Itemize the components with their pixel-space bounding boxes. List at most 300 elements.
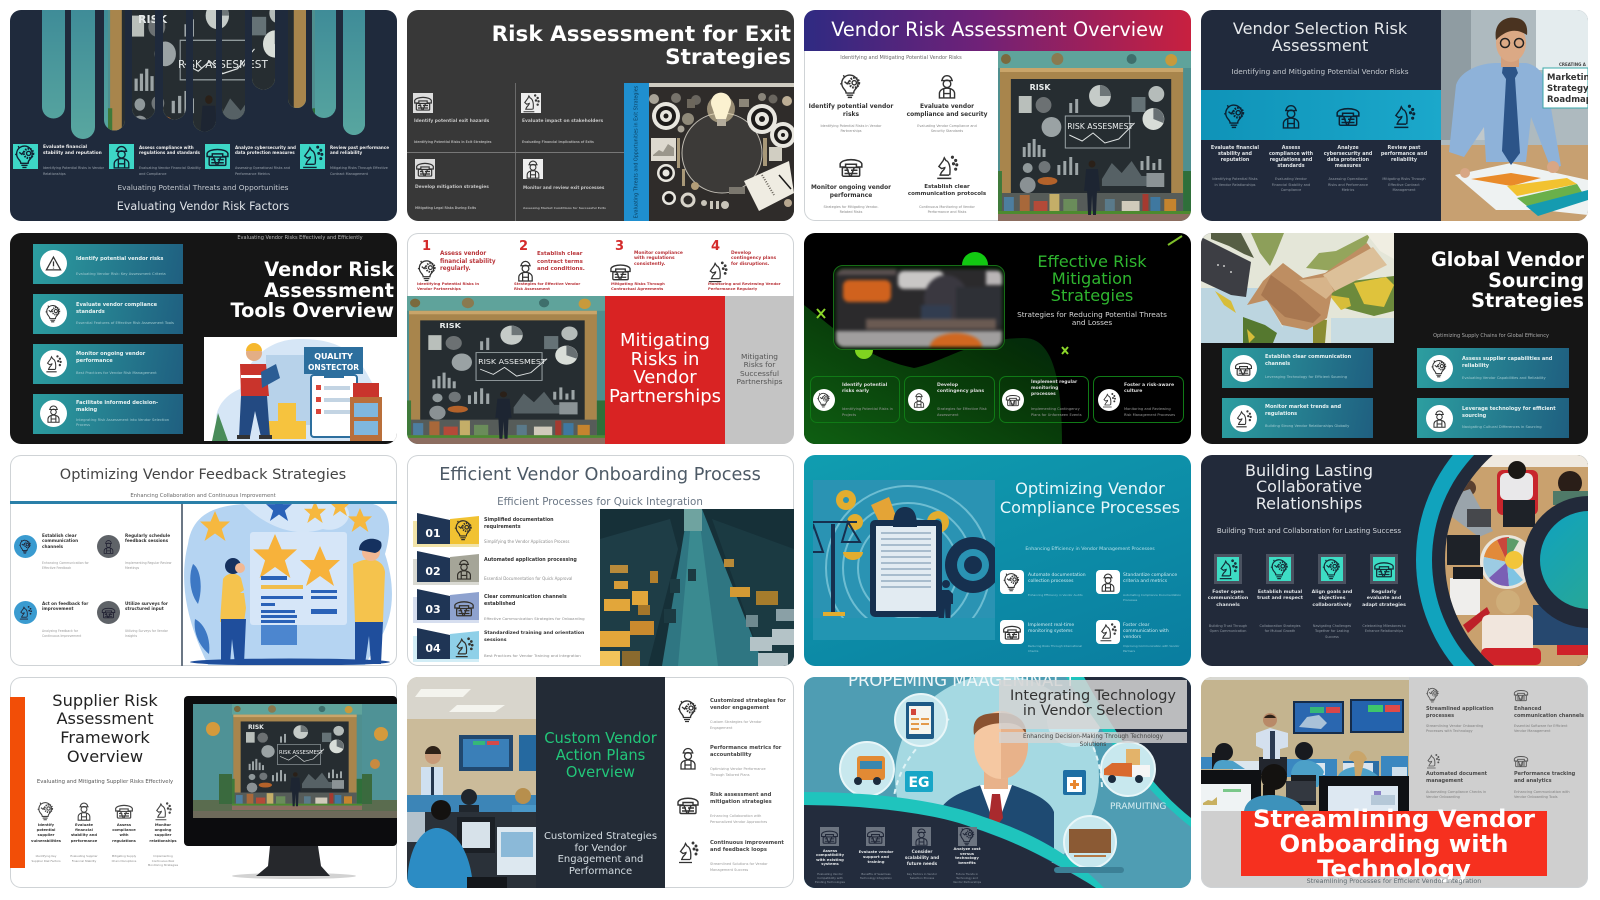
- item: vulnerabilities: [26, 799, 66, 873]
- card: market trends: Building Strong Vendor Relationships Globally: [1265, 424, 1349, 428]
- title: Mitigation: [1052, 268, 1132, 288]
- item: scalability: Key Factors in Vendor: [907, 872, 937, 876]
- slide: Mitigating Risks in Vendor Partnerships: [407, 233, 794, 444]
- icon: [1266, 554, 1294, 584]
- item: financial: reputation: [1221, 158, 1249, 163]
- item: compatibility: Compatibility with: [817, 876, 843, 880]
- subtitle overlay: Enhancing Decision-Making Through Technology: [1023, 734, 1163, 740]
- icon: [415, 159, 435, 179]
- step 04: sessions: [484, 638, 507, 643]
- illustration: compliance clipboard: [813, 480, 995, 640]
- vertical text: Evaluating Threats and Opportunities in Exit Strategies: [634, 86, 639, 218]
- item: schedule: feedback sessions: [125, 538, 168, 543]
- item: financial stability: [13, 144, 104, 176]
- title: Optimizing Vendor: [1015, 479, 1165, 498]
- item: compliance: [104, 799, 144, 873]
- item: compliance: and Compliance: [139, 172, 166, 176]
- icon: [1230, 355, 1257, 382]
- title: Vendor Risk: [264, 258, 394, 281]
- number: 1: [422, 239, 431, 254]
- item: evaluate: [906, 75, 988, 133]
- item: compliance: Evaluating Vendor Financial Stability: [139, 166, 201, 170]
- photo: man at strategy table: [1441, 10, 1588, 221]
- icon: [840, 74, 860, 98]
- card: communication: Establish clear communication: [1265, 354, 1351, 360]
- item: continuous improvement: Management Success: [710, 868, 748, 872]
- item: channels: channels: [42, 544, 63, 549]
- item: cybersecurity: [205, 144, 296, 176]
- item: exit hazards: Identifying Potential Risks in Exit Strategies: [414, 140, 492, 144]
- red title panel: [605, 296, 725, 444]
- item: real-time monitoring: Reducing Risks Through International: [1028, 644, 1082, 648]
- subtitle: Efficient Processes for Quick Integration: [497, 496, 703, 508]
- item: cost: technology: [955, 855, 979, 860]
- title: Strategies: [1051, 286, 1133, 304]
- title: Relationships: [1256, 494, 1362, 513]
- item: financial stability: financial: [75, 828, 93, 832]
- item: cybersecurity: Analyze cybersecurity and: [235, 145, 296, 150]
- box 2: contingency plans: [937, 389, 984, 394]
- item: evaluate strategies: evaluate and: [1367, 596, 1401, 601]
- side band: [624, 83, 649, 221]
- box 4: culture: [1124, 389, 1142, 394]
- icon: [1318, 554, 1346, 584]
- item: custom strategies: Engagement: [710, 726, 732, 730]
- item: metrics: [675, 745, 793, 785]
- item: compliance: Assess: [1282, 146, 1300, 151]
- item 3: Monitor compliance: [634, 251, 683, 256]
- box 3: Plans for Unforeseen Events: [1031, 413, 1082, 417]
- item: compatibility: Assess: [823, 848, 837, 853]
- item: clear communication: Foster clear: [1123, 623, 1149, 628]
- item: cybersecurity: Assessing Operational Risks and: [235, 166, 290, 170]
- item: standardize: Automating Compliance Documentation: [1123, 593, 1181, 597]
- icon: phone: [205, 144, 230, 169]
- item: monitoring: ongoing: [155, 828, 171, 832]
- item: communication channels: communication channels: [1514, 712, 1584, 718]
- item: align goals: Success: [1325, 635, 1339, 639]
- subtitle: Evaluating Potential Threats and Opportunities: [118, 183, 288, 192]
- item 1: [417, 239, 496, 291]
- icon: [813, 389, 835, 411]
- item: financial stability: Identifying Potential Risks in Vendor: [43, 166, 104, 170]
- title: [1000, 479, 1180, 517]
- item: communication channels: Enhanced: [1514, 706, 1541, 712]
- item: real-time monitoring: monitoring systems: [1028, 629, 1073, 634]
- item: schedule: Regularly schedule: [125, 533, 170, 538]
- title: Overview: [67, 747, 143, 766]
- item: stakeholders: Evaluating Financial Implications of Exits: [522, 140, 594, 144]
- item: evaluate strategies: adapt strategies: [1362, 603, 1406, 608]
- panel title: Action Plans: [556, 747, 645, 764]
- center panel: [536, 677, 665, 888]
- item: performance: Review past: [1388, 146, 1420, 151]
- card: identify risks: [33, 244, 183, 284]
- slide: Vendor Risk Assessment Tools Overview: [10, 233, 397, 444]
- wall sign: [1543, 62, 1596, 108]
- item: continuous improvement: [675, 839, 793, 879]
- item: past performance: Contract Management: [330, 172, 368, 176]
- item: risk assessment: mitigation strategies: [710, 799, 772, 805]
- box 4: Monitoring and Reviewing: [1124, 407, 1171, 411]
- item: cybersecurity: Performance Metrics: [235, 172, 270, 176]
- number tab: [413, 628, 481, 662]
- item: application processes: Streamlined application: [1426, 706, 1494, 712]
- item: cost: versus: [960, 851, 974, 856]
- item: compatibility: with existing: [816, 857, 844, 862]
- item: financial stability: [64, 799, 104, 873]
- subtitle: Optimizing Supply Chains for Global Efficiency: [1433, 333, 1549, 339]
- item: communication channels: [1513, 687, 1585, 739]
- item: vendor support: training: [868, 859, 884, 864]
- item: mitigation: Develop mitigation strategies: [415, 185, 489, 190]
- item 2: contract terms: [537, 258, 583, 264]
- icon: [153, 801, 173, 821]
- image: sliced chalkboard strips: RISK ASSESMEST: [178, 59, 268, 71]
- image: risk assessment chalkboard: RISK: [1030, 83, 1051, 92]
- item: cybersecurity: [1324, 108, 1372, 192]
- card: compliance standards: [33, 294, 183, 334]
- item: cybersecurity: Metrics: [1342, 188, 1354, 192]
- item: monitor: Monitor ongoing vendor: [811, 185, 891, 191]
- icon: [1214, 554, 1242, 584]
- item: compliance: regulations and standards: [139, 150, 200, 155]
- item: align goals: Align goals and: [1312, 590, 1352, 595]
- number tab: [413, 589, 481, 623]
- item: mutual trust: Establish mutual: [1258, 590, 1302, 595]
- icon circle: [40, 350, 67, 377]
- item: financial stability: performance: [71, 839, 97, 843]
- item: metrics: Through Tailored Plans: [710, 773, 750, 777]
- box 3: Implement regular: [1031, 380, 1077, 385]
- icon: [1394, 104, 1416, 128]
- icon: [1426, 355, 1453, 382]
- item: financial: in Vendor Relationships: [1214, 182, 1256, 186]
- item: compliance: standards: [1277, 164, 1305, 169]
- step 01: requirements: [484, 525, 521, 530]
- item: real-time monitoring: [1000, 620, 1090, 662]
- item: surveys: Utilize surveys for: [125, 601, 168, 606]
- item: identify: [809, 74, 894, 133]
- item 4: Monitoring and Reviewing Vendor: [708, 281, 781, 286]
- item: open communication: [1202, 554, 1254, 646]
- wall sign: Strategy: [1547, 84, 1588, 94]
- box 1: Projects: [842, 413, 856, 417]
- subtitle: Building Trust and Collaboration for Lasting Success: [1217, 526, 1401, 535]
- item: document management: [1425, 753, 1507, 805]
- item: evaluate strategies: [1358, 554, 1410, 646]
- image: desktop monitor with chalkboard: RISK ASSESMEST: [279, 750, 324, 756]
- item: past performance: [300, 144, 389, 176]
- slide: Vendor Selection Risk Assessment: [1201, 10, 1588, 221]
- step 04: Best Practices for Vendor Training and Integration: [484, 653, 581, 658]
- number: 2: [519, 239, 528, 254]
- panel title: Overview: [566, 764, 635, 781]
- icon: [114, 801, 134, 821]
- icon: [820, 827, 839, 846]
- item: stakeholders: Evaluate impact on stakeholders: [522, 119, 603, 124]
- step 04: [413, 628, 598, 662]
- item: custom strategies: vendor engagement: [710, 705, 769, 711]
- item: monitoring: Monitoring Strategies: [148, 863, 178, 867]
- item 2: [514, 239, 585, 291]
- card: leverage technology: Leverage technology for efficient: [1462, 406, 1556, 412]
- number: 4: [711, 239, 720, 254]
- icon: [676, 840, 700, 864]
- icon: [1425, 687, 1441, 703]
- item 1: Assess vendor: [440, 251, 486, 257]
- box 4: Foster a risk-aware: [1124, 383, 1174, 388]
- item: cost: benefits: [958, 860, 976, 865]
- box 4: [1093, 376, 1184, 423]
- icon circle: [40, 400, 67, 427]
- card: market trends: regulations: [1265, 410, 1297, 416]
- card: monitor performance: performance: [76, 358, 113, 364]
- item: financial stability: Financial Stability: [72, 858, 96, 862]
- item: past performance: Review past performance: [330, 145, 389, 150]
- title: Strategies: [1471, 289, 1584, 312]
- column rule: [181, 504, 183, 666]
- item: channels: Effective Feedback: [42, 566, 71, 570]
- item: schedule: Meetings: [125, 566, 139, 570]
- image: photo in concentric circles: [1416, 455, 1588, 666]
- item: compliance: Assess: [117, 823, 131, 827]
- item: financial: [1211, 104, 1259, 186]
- item 1: Identifying Potential Risks in: [417, 281, 479, 286]
- card: supplier capabilities: reliability: [1462, 362, 1489, 368]
- item: open communication: communication: [1208, 596, 1248, 601]
- item: act on feedback: [14, 601, 94, 641]
- card: leverage technology: sourcing: [1462, 412, 1486, 418]
- title: Assessment: [264, 279, 394, 302]
- step 03: [413, 589, 598, 623]
- icon: [14, 535, 37, 558]
- slide: Vendor Risk Assessment Overview: [804, 10, 1191, 221]
- box 1: risks early: [842, 389, 869, 394]
- item: align goals: objectives: [1318, 596, 1346, 601]
- item: monitor: [523, 159, 606, 210]
- photo: warehouse aisle: [600, 509, 794, 666]
- grey side panel: [725, 296, 794, 444]
- item: documentation: Automate documentation: [1028, 573, 1086, 578]
- subtitle overlay: [999, 732, 1187, 743]
- item: performance: [1381, 104, 1427, 192]
- title: [492, 22, 791, 70]
- item 3: Mitigating Risks Through: [611, 281, 665, 286]
- slide: Evaluating Vendor Risk Factors: [10, 10, 397, 221]
- wall sign: CREATING A: [1559, 62, 1587, 67]
- title overlay: Integrating Technology: [1010, 688, 1176, 704]
- item: performance tracking: [1513, 753, 1585, 805]
- grey side panel: Partnerships: [736, 377, 782, 386]
- red title panel: Vendor: [633, 367, 697, 388]
- item: metrics: accountability: [710, 752, 752, 758]
- icon: [74, 801, 94, 821]
- item: documentation: collection processes: [1028, 579, 1073, 584]
- icon: worker: [109, 144, 134, 169]
- icon: [1426, 405, 1453, 432]
- item: evaluate strategies: Regularly: [1371, 590, 1397, 595]
- item: compatibility: Existing Technologies: [815, 880, 845, 884]
- box 2: [904, 376, 995, 423]
- item: monitor: performance: [830, 193, 872, 199]
- item: financial: Identifying Potential Risks: [1212, 177, 1258, 181]
- red title panel: Risks in: [631, 348, 699, 370]
- item: vulnerabilities: Identify: [38, 823, 54, 827]
- card: compliance standards: standards: [76, 309, 105, 315]
- photo: operations room: [407, 677, 536, 888]
- center panel: Engagement and: [558, 854, 643, 865]
- item: vendor support: Benefits of Seamless: [861, 872, 891, 876]
- item: communication: Continuous Monitoring of Vendor: [919, 205, 975, 209]
- slide: Efficient Vendor Onboarding Process: [407, 455, 794, 666]
- item: performance tracking: Vendor Onboarding Tools: [1514, 795, 1558, 799]
- item: metrics: Performance metrics for: [710, 745, 781, 751]
- card: compliance standards: Evaluate vendor compliance: [76, 302, 157, 308]
- step 01: Simplified documentation: [484, 518, 554, 523]
- item: application processes: [1425, 687, 1507, 739]
- grey side panel: Successful: [740, 369, 779, 378]
- title: Supplier Risk: [52, 690, 158, 710]
- icon: [14, 601, 37, 624]
- item: continuous improvement: Streamlined Solutions for Vendor: [710, 862, 768, 866]
- item: mitigation: Mitigating Legal Risks During Exits: [415, 206, 476, 210]
- item: past performance: and reliability: [330, 150, 362, 155]
- image: risk assessment chalkboard: RISK ASSESMEST: [1067, 122, 1134, 131]
- item: performance: performance and: [1381, 152, 1427, 157]
- item: application processes: processes: [1426, 712, 1454, 718]
- item 3: Contractual Agreements: [611, 286, 663, 291]
- item: vulnerabilities: Identifying Key: [36, 854, 56, 858]
- icon band: [1201, 90, 1441, 140]
- item: vulnerabilities: supplier: [38, 833, 54, 837]
- center panel: Customized Strategies: [544, 831, 657, 842]
- item: compliance: Financial Stability and: [1272, 182, 1310, 186]
- box 3: [999, 376, 1089, 423]
- item: communication: Performance and Risks: [928, 210, 966, 214]
- title: [230, 258, 394, 322]
- item: scalability: future needs: [907, 861, 937, 866]
- step 02: [413, 551, 598, 585]
- item: mutual trust: Collaboration Strategies: [1260, 624, 1300, 628]
- icon: [523, 159, 543, 179]
- item: performance tracking: Enhancing Communication with: [1514, 790, 1570, 794]
- icon circle: [40, 250, 67, 277]
- item: custom strategies: [675, 697, 793, 737]
- icon: [937, 156, 958, 180]
- icon: [676, 746, 700, 770]
- item: evaluate strategies: Celebrating Milestones to: [1362, 624, 1406, 628]
- item: communication channels: Essential Software for Efficient: [1514, 724, 1568, 728]
- item: custom strategies: Custom Strategies for Vendor: [710, 720, 762, 724]
- slide: Streamlining Vendor Onboarding with Technology: [1201, 677, 1588, 888]
- item: open communication: Open Communication: [1210, 629, 1246, 633]
- item: channels: [14, 533, 94, 573]
- card: leverage technology: [1417, 398, 1569, 438]
- icon: [839, 158, 863, 177]
- subtitle: and Losses: [1072, 318, 1112, 327]
- item: open communication: Building Trust Through: [1209, 624, 1247, 628]
- card: supplier capabilities: Evaluating Vendor Capabilities and Reliability: [1462, 376, 1546, 380]
- item: compliance: Mitigating Supply: [112, 854, 136, 858]
- item: standardize: Processes: [1123, 598, 1137, 602]
- item 1: regularly.: [440, 266, 471, 272]
- title: Building Lasting: [1245, 460, 1373, 480]
- slide: Building Lasting Collaborative Relationships: [1201, 455, 1588, 666]
- slide: Global Vendor Sourcing Strategies: [1201, 233, 1588, 444]
- slide: Optimizing Vendor Feedback Strategies: [10, 455, 397, 666]
- illustration: business person with icons: EG: [908, 775, 930, 791]
- step 03: established: [484, 602, 515, 607]
- number tab: [413, 551, 481, 585]
- slide: Optimizing Vendor Compliance Processes: [804, 455, 1191, 666]
- item: monitoring: Monitor: [155, 823, 171, 827]
- item: evaluate: Security Standards: [931, 129, 963, 133]
- item 2: Establish clear: [537, 251, 582, 257]
- item: financial stability: Evaluate financial: [43, 145, 87, 150]
- item: compliance: compliance with: [1269, 152, 1313, 157]
- card: communication: [1222, 348, 1373, 388]
- item: surveys: structured input: [125, 606, 164, 611]
- card: informed decisions: Integrating Risk Assessment into Vendor Selection: [76, 418, 169, 422]
- item: vendor support: [856, 825, 898, 887]
- item: clear communication: communication with: [1123, 629, 1169, 634]
- box 3: processes: [1031, 392, 1056, 397]
- item: compatibility: [810, 825, 852, 887]
- item: compatibility: compatibility: [816, 852, 844, 857]
- item: monitor: Assessing Market Conditions for Successful Exits: [523, 206, 606, 210]
- background glow and accents: [804, 235, 1182, 444]
- image: desktop monitor with chalkboard: [184, 696, 397, 881]
- card: supplier capabilities: [1417, 348, 1569, 388]
- box 3: monitoring: [1031, 386, 1058, 391]
- item: compliance: regulations: [112, 839, 136, 843]
- item: act on feedback: Continuous Improvement: [42, 634, 81, 638]
- item: compliance: with: [119, 833, 129, 837]
- item: cost: [947, 825, 989, 887]
- item: cybersecurity: Assessing Operational: [1329, 177, 1367, 181]
- icon tile: [1000, 620, 1024, 644]
- title: Assessment: [1272, 36, 1368, 55]
- slide: Integrating Technology in Vendor Selection: Solutions: [1080, 742, 1106, 748]
- item: continuous improvement: and feedback loops: [710, 847, 767, 853]
- number tab: 01: [425, 527, 441, 540]
- icon: [1513, 687, 1529, 703]
- title: [1233, 19, 1408, 55]
- item: past performance: Mitigating Risks Through Effective: [330, 166, 388, 170]
- icon: [958, 827, 977, 846]
- item: cybersecurity: data protection: [1327, 158, 1369, 163]
- item: act on feedback: improvement: [42, 606, 74, 611]
- card: identify risks: Evaluating Vendor Risk: Key Assessment Criteria: [76, 272, 166, 276]
- item: cybersecurity: cybersecurity and: [1324, 152, 1372, 157]
- item: vulnerabilities: Supplier Risk Factors: [31, 858, 61, 862]
- card: market trends: [1222, 398, 1373, 438]
- item: monitoring: Implementing: [153, 854, 173, 858]
- card: identify risks: Identify potential vendor risks: [76, 256, 163, 262]
- step 02: Automated application processing: [484, 558, 577, 563]
- item: exit hazards: Identify potential exit hazards: [414, 119, 489, 124]
- icon: [1282, 105, 1300, 129]
- item: document management: management: [1426, 778, 1463, 784]
- step 03: Effective Communication Strategies for Onboarding: [484, 616, 585, 621]
- item 4: for disruptions.: [731, 262, 769, 267]
- item: continuous improvement: Continuous improvement: [710, 840, 784, 846]
- item: align goals: [1306, 554, 1358, 646]
- step 01: Simplifying the Vendor Application Process: [484, 539, 569, 544]
- title: Optimizing Vendor Feedback Strategies: [60, 467, 346, 483]
- item 4: Develop: [731, 251, 751, 256]
